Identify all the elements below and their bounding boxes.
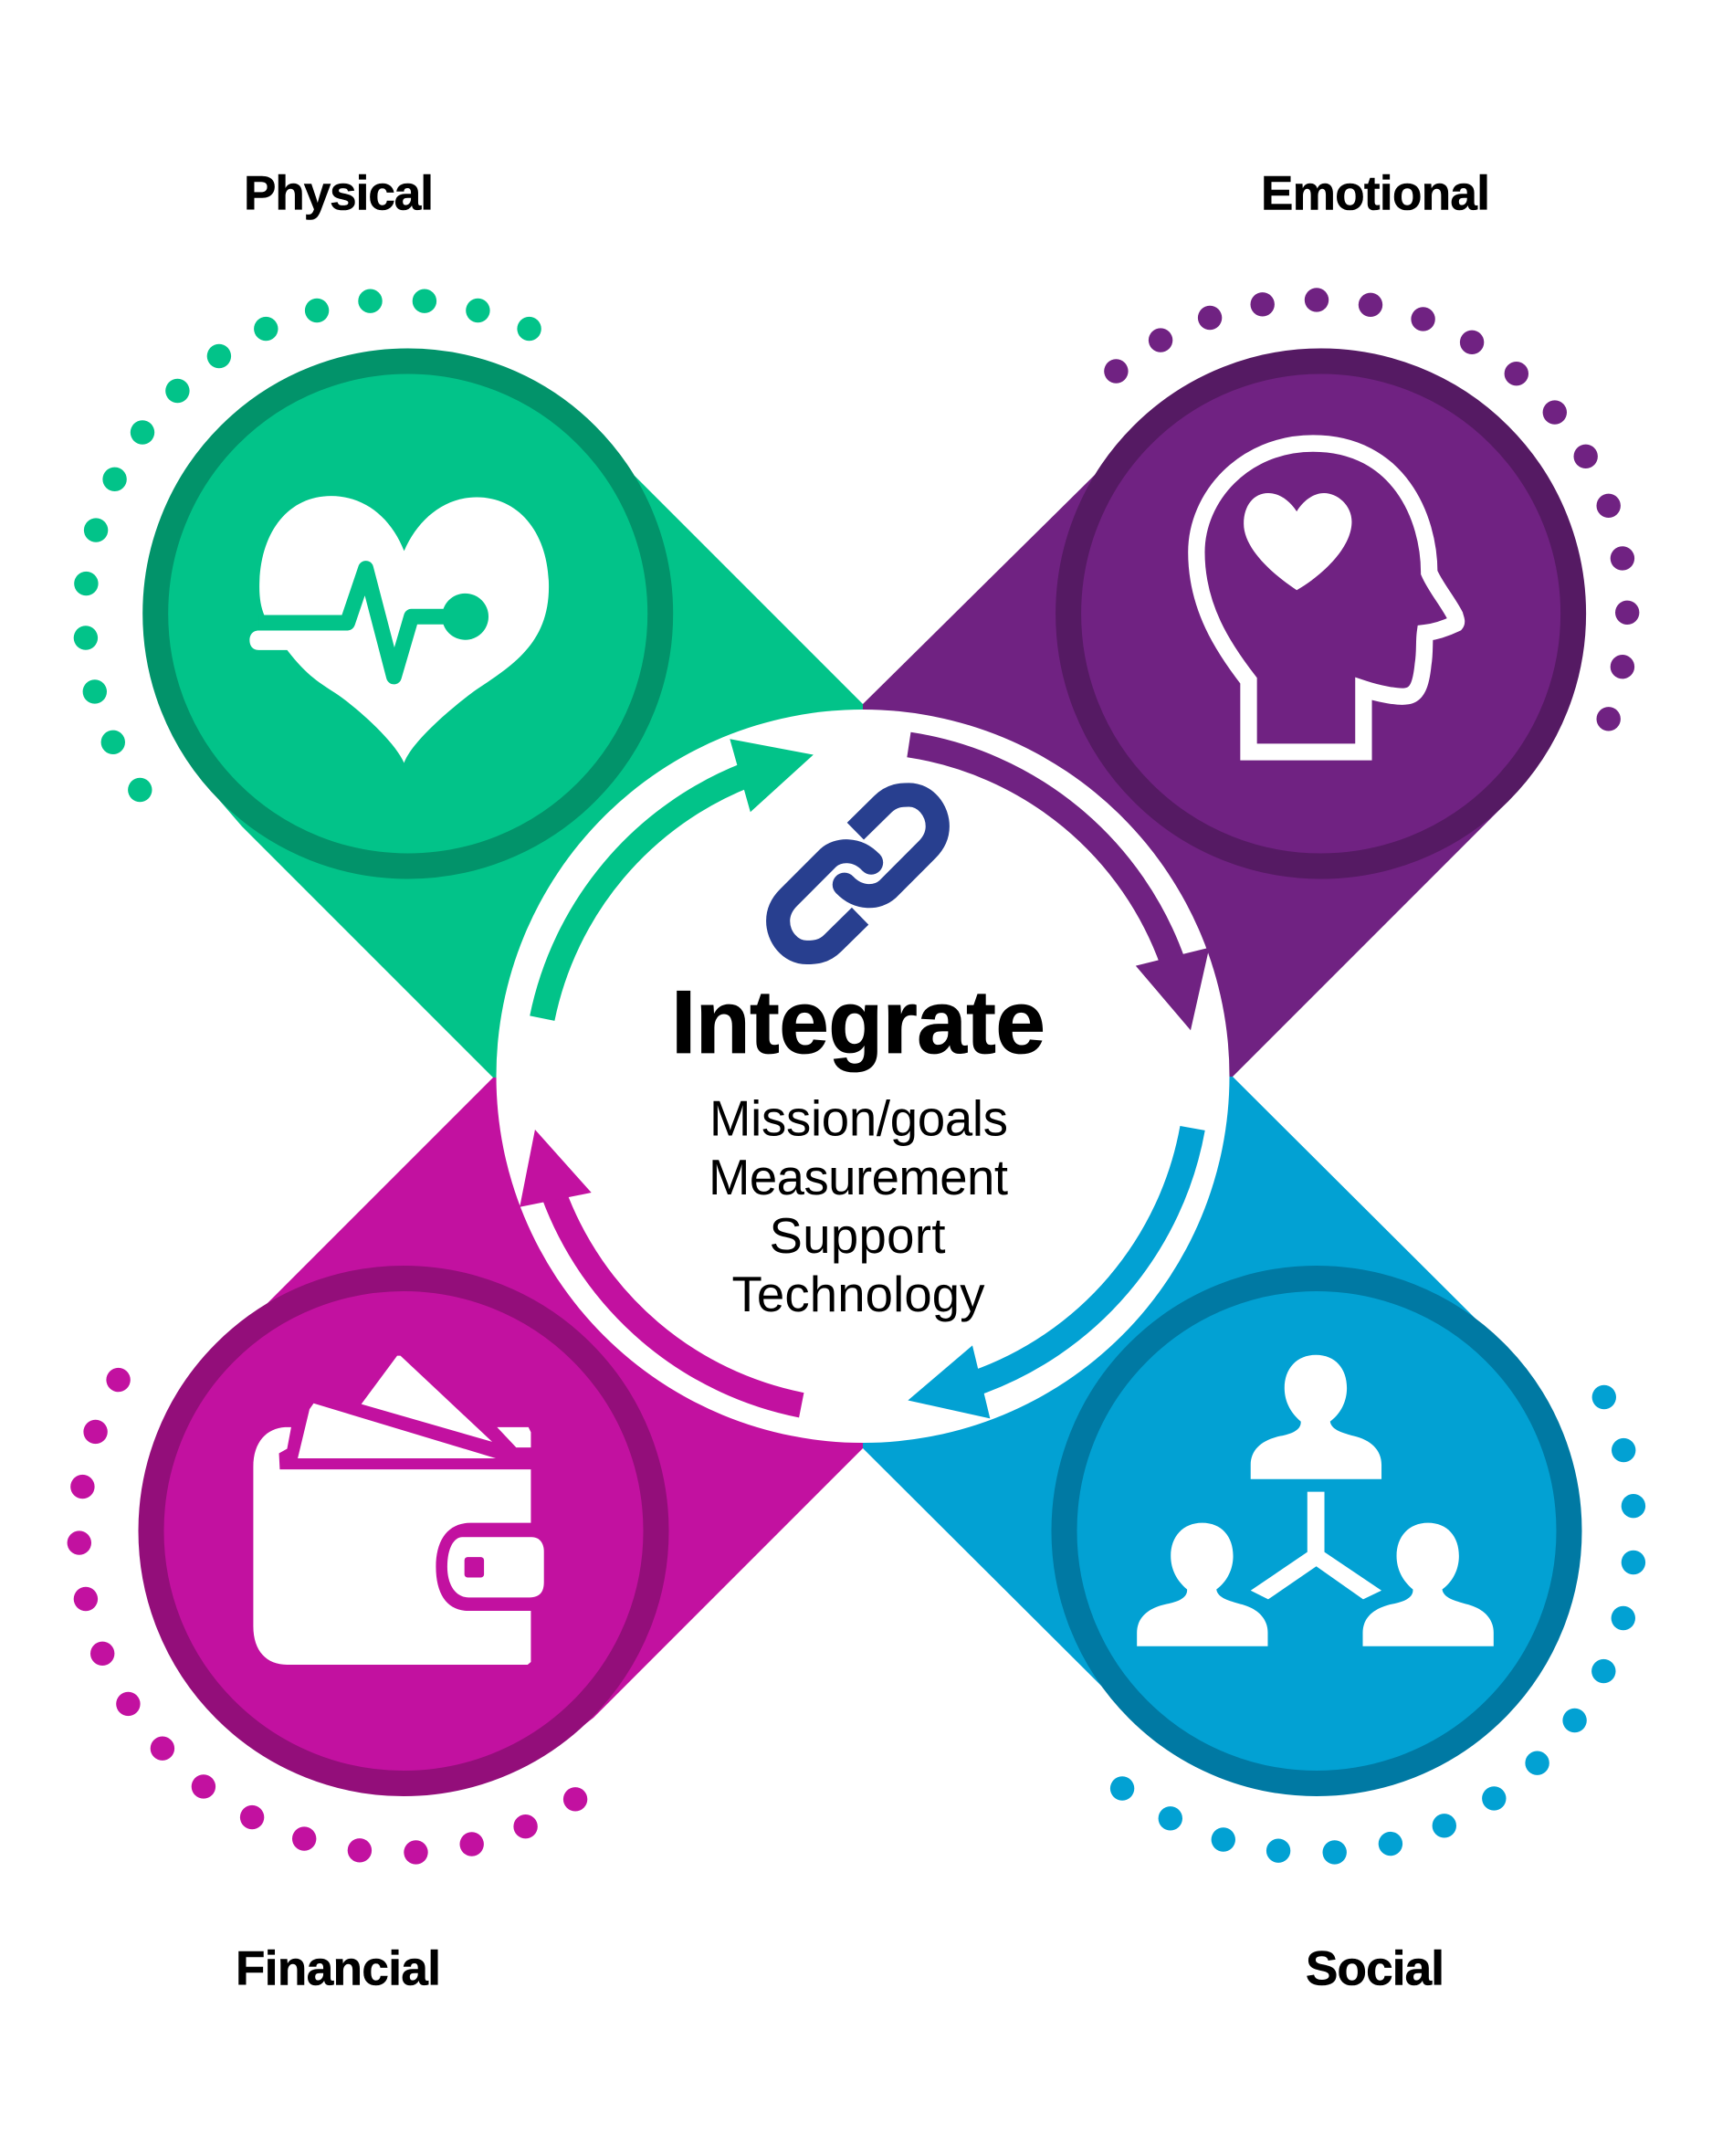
arrow: magenta xyxy=(520,1130,802,1405)
arrow: purple xyxy=(909,744,1209,1030)
center circle xyxy=(497,710,1229,1443)
label: Financial: Financial xyxy=(236,1941,441,1996)
title: Integrate: Integrate xyxy=(671,972,1045,1072)
label: Emotional: Emotional xyxy=(1261,166,1490,221)
cycle arrows xyxy=(520,739,1209,1418)
dotted arc: physical xyxy=(74,289,541,802)
arrow: green xyxy=(542,739,814,1018)
dotted arc: financial xyxy=(68,1368,587,1865)
icon: heart with pulse xyxy=(249,496,549,763)
panel: social quadrant xyxy=(863,1076,1497,1688)
icon: wallet xyxy=(253,1356,544,1665)
text: focus list: Measurement xyxy=(709,1150,1008,1205)
circle: social xyxy=(1065,1278,1569,1783)
label: Social: Social xyxy=(1306,1941,1444,1996)
circle: financial xyxy=(152,1278,656,1783)
label: Physical: Physical xyxy=(244,166,434,221)
icon: connected people xyxy=(1137,1355,1494,1646)
text: focus list xyxy=(709,1090,1008,1322)
icon: chain link xyxy=(778,794,938,952)
panel: emotional quadrant xyxy=(863,473,1500,1077)
circle: physical xyxy=(155,362,660,866)
text: focus list: Mission/goals xyxy=(709,1090,1008,1147)
circle: emotional xyxy=(1068,362,1573,866)
text: focus list: Support xyxy=(769,1208,946,1264)
dotted arc: social xyxy=(1110,1385,1645,1865)
dotted arc: emotional xyxy=(1104,288,1639,731)
panel: financial quadrant xyxy=(267,1076,863,1730)
text: focus list: Technology xyxy=(732,1267,985,1322)
panel: physical quadrant xyxy=(219,476,863,1078)
arrow: blue xyxy=(908,1128,1192,1418)
icon: head with heart xyxy=(1196,444,1456,752)
